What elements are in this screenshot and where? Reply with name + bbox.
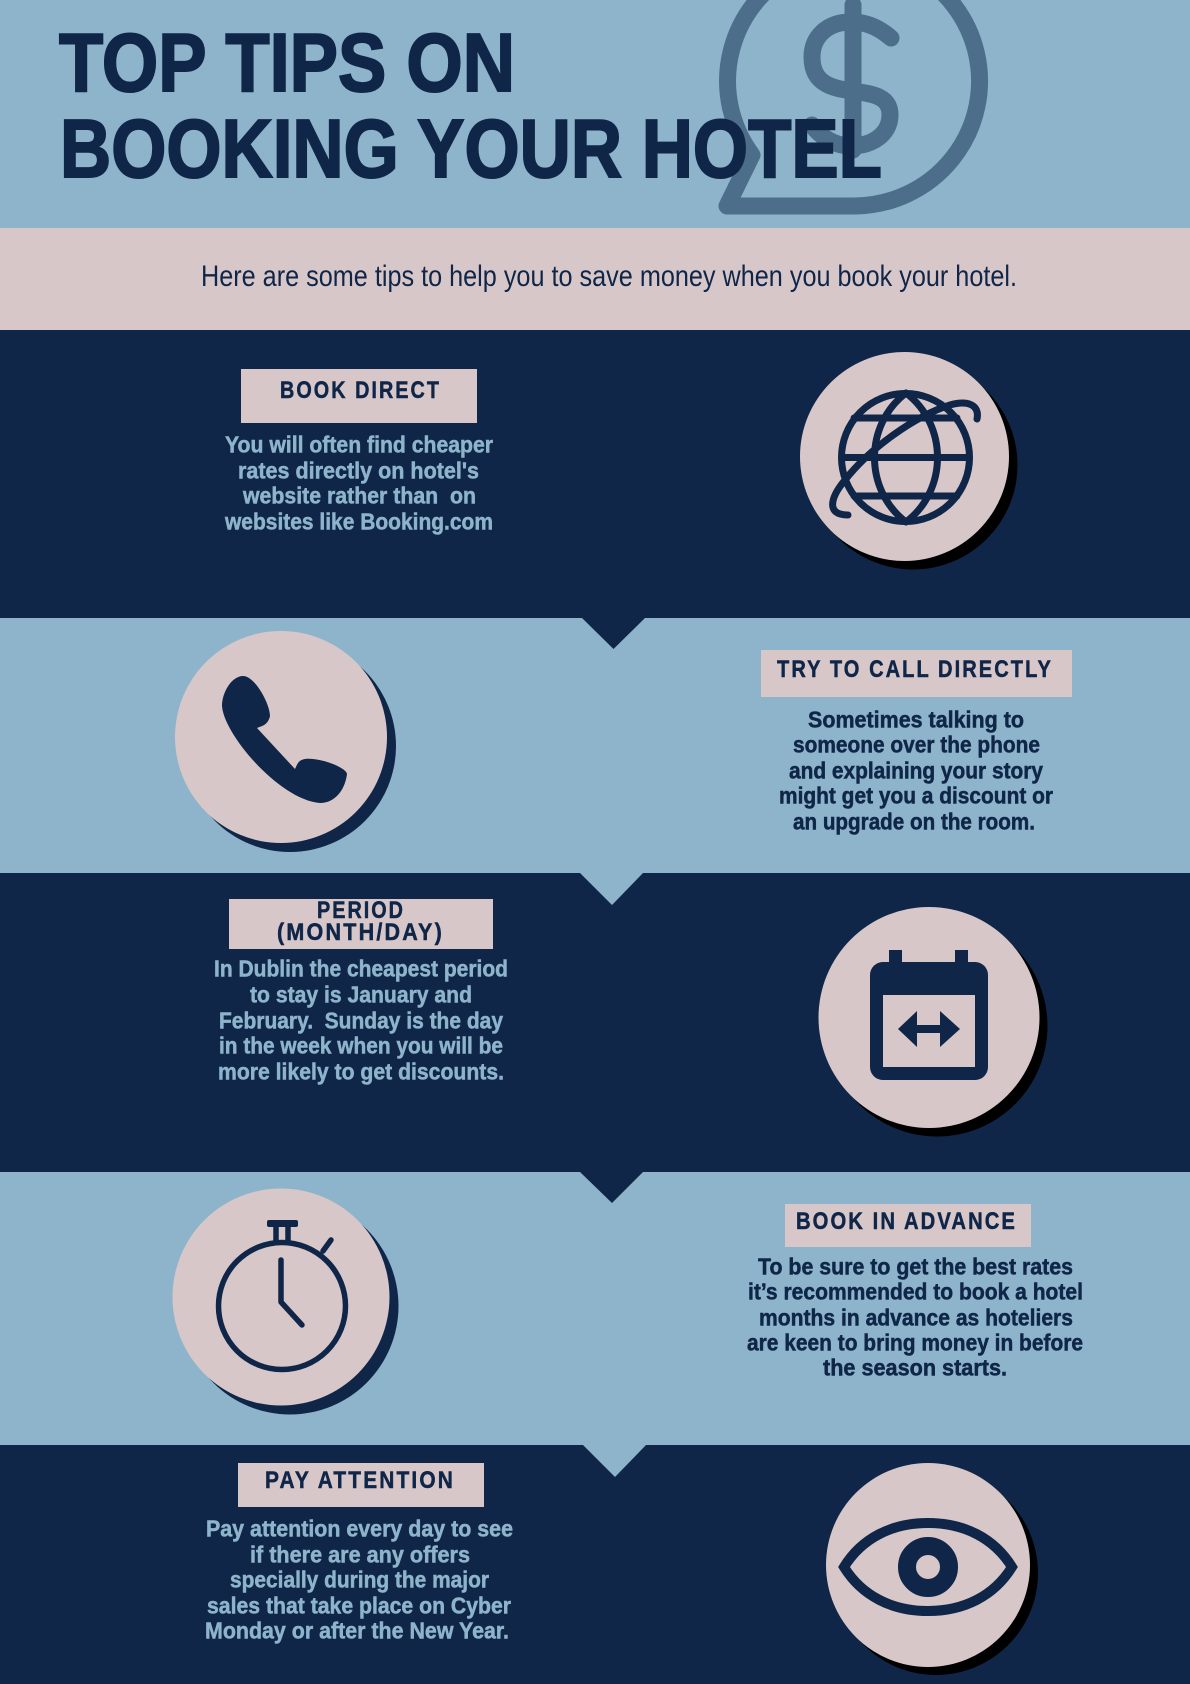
heading: book in advance (785, 1204, 1031, 1247)
text: pay attention: specially during the major (230, 1566, 489, 1592)
text: period: In Dublin the cheapest period (214, 956, 508, 982)
text: book direct: You will often find cheaper (225, 432, 493, 458)
text: book in advance: To be sure to get the best rates (758, 1254, 1073, 1280)
text: try to call directly: someone over the phone (793, 732, 1040, 758)
heading: period: PERIOD (317, 897, 405, 924)
heading: book direct: BOOK DIRECT (280, 377, 441, 404)
heading: period (229, 897, 493, 949)
heading: pay attention (238, 1463, 484, 1507)
text: book in advance: the season starts. (823, 1354, 1007, 1380)
text: book in advance: months in advance as hoteliers (759, 1304, 1073, 1330)
icon: calendar (818, 907, 1048, 1136)
text: period: in the week when you will be (219, 1032, 503, 1058)
text: pay attention: sales that take place on Cyber (207, 1592, 511, 1618)
panel: header (0, 0, 1190, 228)
text: book in advance (747, 1254, 1083, 1380)
text: pay attention: Pay attention every day to see (206, 1516, 513, 1542)
panel: book direct (0, 330, 1190, 618)
text: try to call directly (779, 706, 1053, 834)
text: book direct: website rather than on (242, 482, 476, 508)
heading: book in advance: BOOK IN ADVANCE (796, 1208, 1017, 1235)
icon: globe (800, 352, 1018, 570)
arrow: pointer from call directly (580, 873, 643, 905)
heading: book direct (241, 369, 477, 423)
text: pay attention: Monday or after the New Year. (205, 1618, 509, 1644)
heading: try to call directly (761, 650, 1072, 697)
icon: telephone (175, 631, 396, 852)
text: book direct: websites like Booking.com (224, 508, 493, 534)
text: try to call directly: an upgrade on the room. (793, 808, 1035, 834)
text: period: February. Sunday is the day (219, 1008, 503, 1034)
heading: period: (MONTH/DAY) (277, 919, 444, 946)
icon: stopwatch (172, 1188, 398, 1414)
text: period: to stay is January and (250, 982, 472, 1008)
text: try to call directly: and explaining your story (789, 758, 1043, 784)
arrow: pointer from period (580, 1172, 643, 1203)
icon: eye (826, 1463, 1038, 1675)
panel: book in advance (0, 1172, 1190, 1445)
panel: intro strip (0, 228, 1190, 330)
text: book direct (224, 432, 493, 534)
title: BOOKING YOUR HOTEL (60, 102, 882, 195)
panel: try to call directly (0, 618, 1190, 873)
text: book in advance: it’s recommended to book a hotel (748, 1278, 1083, 1304)
text: book in advance: are keen to bring money in before (747, 1330, 1083, 1356)
title (59, 16, 882, 195)
arrow: pointer from book direct (582, 618, 645, 649)
intro text: Here are some tips to help you to save money when you book your hotel. (201, 260, 1017, 293)
text: period (214, 956, 508, 1084)
panel: pay attention (0, 1445, 1190, 1684)
panel: period (0, 873, 1190, 1172)
text: try to call directly: might get you a discount or (779, 782, 1053, 808)
text: try to call directly: Sometimes talking to (808, 706, 1024, 732)
title: TOP TIPS ON (59, 16, 515, 109)
text: period: more likely to get discounts. (218, 1058, 504, 1084)
text: pay attention (205, 1516, 513, 1644)
text: pay attention: if there are any offers (250, 1542, 470, 1568)
heading: pay attention: PAY ATTENTION (265, 1467, 455, 1494)
heading: try to call directly: TRY TO CALL DIRECTLY (777, 656, 1053, 683)
arrow: pointer from book in advance (583, 1445, 646, 1477)
icon: speech bubble with dollar sign (727, 0, 980, 206)
text: book direct: rates directly on hotel's (238, 458, 479, 484)
